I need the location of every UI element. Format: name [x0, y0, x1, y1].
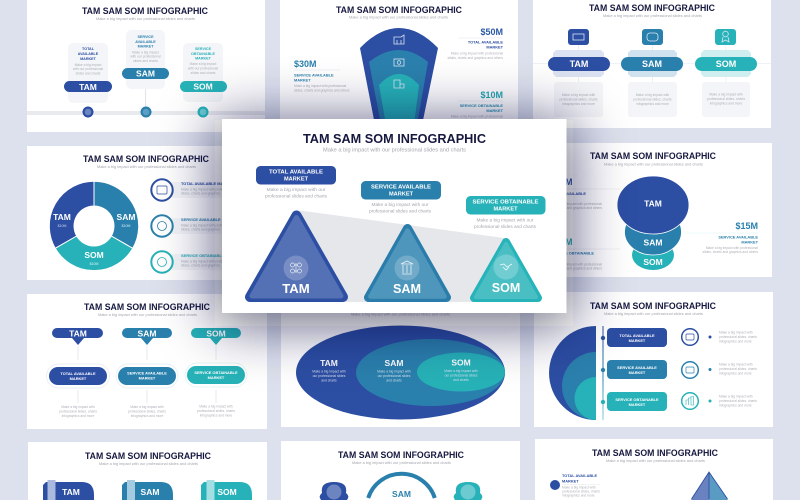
- panel: speech pills slide: TAM SAM SOM INFOGRAPHIC: [84, 302, 210, 313]
- panel: timeline slide: TAM SAM SOM INFOGRAPHIC: [82, 6, 208, 17]
- panel: fan slide: [280, 0, 518, 125]
- panel: donut slide: Make a big impact with professional: [181, 188, 233, 192]
- panel: speech pills slide: infographics and more: [131, 414, 163, 418]
- panel: donut slide: SAM: [117, 212, 135, 222]
- panel: stacked pills slide: SAM: [642, 59, 662, 69]
- panel: donut slide: $10M: [58, 224, 66, 228]
- panel: timeline slide: with our professional: [188, 66, 218, 70]
- panel: fan slide: Make a big impact with professional: [294, 84, 346, 88]
- panel: donut slide: SERVICE OBTAINABLE MARKET: [181, 253, 243, 258]
- panel: pyramid slide: TAM SAM SOM INFOGRAPHIC: [592, 448, 718, 459]
- panel: nested ellipses slide: our professional slides: [378, 374, 411, 378]
- SAM triangle: [368, 228, 446, 298]
- SOM label pill: SERVICE OBTAINABLE: [472, 200, 539, 206]
- panel: speech pills slide: MARKET: [70, 376, 87, 381]
- panel: stacked pills slide: infographics and more: [710, 102, 742, 106]
- SAM triangle: SAM: [393, 281, 421, 296]
- panel: stacked ellipses slide: SOM: [643, 257, 663, 267]
- panel: timeline slide: AVAILABLE: [135, 40, 156, 44]
- TAM label pill: [256, 166, 336, 184]
- panel: timeline slide: slides and charts: [133, 59, 158, 63]
- panel: scroll slide: SAM: [141, 487, 159, 497]
- panel: donut slide: SERVICE AVAILABLE MARKET: [181, 217, 239, 222]
- panel: stacked ellipses slide: $15M: [735, 221, 758, 231]
- panel: timeline slide: Make a big impact with our professional slides and charts: [96, 17, 195, 21]
- panel: stacked ellipses slide: SERVICE OBTAINABLE: [551, 250, 594, 256]
- panel: nested ellipses slide: SOM: [451, 358, 471, 368]
- panel: speech pills slide: TOTAL AVAILABLE: [60, 371, 96, 376]
- panel: stacked pills slide: TAM: [570, 59, 588, 69]
- grey connecting wedge: [300, 210, 504, 302]
- panel: scroll slide: SOM: [217, 487, 237, 497]
- panel: half circles slide: MARKET: [629, 402, 646, 407]
- panel: fan slide: MARKET: [486, 44, 504, 50]
- panel: half circles slide: infographics and more: [719, 404, 752, 408]
- panel: timeline slide: slides and charts: [191, 71, 216, 75]
- panel: nested ellipses slide: and charts: [453, 378, 469, 382]
- panel: speech pills slide: SERVICE AVAILABLE: [127, 370, 167, 376]
- panel: pyramid slide: TOTAL AVAILABLE: [562, 473, 598, 478]
- panel: stacked pills slide: SOM: [716, 59, 736, 69]
- panel: speech pills slide: SAM: [138, 328, 156, 338]
- panel: donut slide: $10M: [122, 224, 130, 228]
- SAM label pill: SERVICE AVAILABLE: [371, 184, 431, 190]
- panel: scroll slide: TAM: [62, 487, 80, 497]
- panel: donut slide: TAM: [53, 212, 71, 222]
- panel: main triangles slide: [222, 119, 566, 313]
- panel: timeline slide: with our professional: [73, 67, 103, 71]
- SOM label pill: [466, 196, 546, 214]
- panel: speech pills slide: Make a big impact with: [199, 404, 233, 408]
- panel: timeline slide: MARKET: [138, 44, 154, 48]
- donut chart: [49, 181, 139, 271]
- panel: timeline slide: Make a big impact: [190, 62, 216, 66]
- panel: fan slide: SERVICE OBTAINABLE: [460, 103, 503, 108]
- panel: donut slide: slides, charts and graphics: [181, 228, 220, 232]
- panel: nested ellipses slide: TAM: [320, 358, 338, 368]
- panel: fan slide: TOTAL AVAILABLE: [468, 40, 503, 44]
- icon: TAM network: [284, 256, 308, 280]
- panel: pyramid slide: infographics and more: [562, 494, 595, 498]
- panel: half circles slide: TOTAL AVAILABLE: [619, 333, 655, 338]
- panel: stacked pills slide: Make a big impact with: [709, 92, 743, 96]
- panel: fan slide: MARKET: [294, 78, 311, 82]
- panel: stacked pills slide: Make a big impact with: [636, 93, 669, 97]
- panel: donut slide: TOTAL AVAILABLE MARKET: [181, 181, 235, 186]
- panel: fan slide: SERVICE AVAILABLE: [294, 72, 334, 78]
- panel: timeline slide: SERVICE: [137, 35, 154, 39]
- panel: stacked ellipses slide: TAM SAM SOM INFOGRAPHIC: [590, 151, 716, 162]
- panel: donut slide: Make a big impact with professional: [181, 260, 233, 264]
- panel: speech pills slide: Make a big impact with: [61, 405, 95, 409]
- TAM description: Make a big impact with our: [266, 187, 326, 192]
- panel: half circles slide: TAM SAM SOM INFOGRAPHIC: [590, 301, 716, 312]
- panel: fan slide: $30M: [294, 59, 317, 69]
- panel: stacked ellipses slide: MARKET: [741, 240, 759, 244]
- panel: half circles slide: MARKET: [629, 338, 646, 343]
- panel: half circles slide: professional slides, charts: [719, 367, 757, 371]
- panel: fan slide: Make a big impact with our professional slides and charts: [349, 16, 448, 20]
- panel: half circles slide: professional slides, charts: [719, 399, 757, 403]
- panel: scroll slide: [28, 442, 267, 500]
- SAM description: Make a big impact with our: [372, 202, 429, 207]
- panel: stacked ellipses slide: SAM: [644, 238, 662, 248]
- panel: nested ellipses slide: Make a big impact with: [377, 370, 411, 374]
- panel: donut slide: SOM: [84, 250, 104, 260]
- SOM description: [474, 218, 536, 229]
- icon: SAM bank: [394, 256, 420, 280]
- panel: stacked ellipses slide: Make a big impact with professional: [706, 246, 758, 250]
- panel: stacked pills slide: TAM SAM SOM INFOGRAPHIC: [589, 3, 715, 14]
- panel: speech pills slide: MARKET: [208, 375, 225, 380]
- panel: speech pills slide: professional slides, charts: [197, 409, 235, 413]
- panel: nested ellipses slide: Make a big impact with our professional slides and charts: [351, 312, 450, 316]
- panel: speech pills slide: SOM: [206, 328, 226, 338]
- panel: half circles slide: Make a big impact with our professional slides and charts: [604, 312, 703, 316]
- panel: stacked pills slide: professional slides, charts: [707, 97, 745, 101]
- panel: speech pills slide: Make a big impact with our professional slides and charts: [98, 313, 197, 317]
- panel: stacked ellipses slide: $10M: [550, 237, 572, 247]
- panel: timeline slide: [27, 0, 265, 132]
- panel: donut slide: [27, 146, 267, 280]
- SOM label pill: MARKET: [494, 206, 518, 212]
- SOM description: professional slides and charts: [474, 224, 536, 229]
- SAM label pill: MARKET: [389, 192, 413, 198]
- panel: stacked ellipses slide: Make a big impact with professional: [550, 262, 602, 266]
- panel: pyramid slide: Make a big impact with: [562, 486, 596, 490]
- panel: timeline slide: AVAILABLE: [78, 52, 99, 56]
- panel: scroll slide: Make a big impact with our professional slides and charts: [99, 462, 198, 466]
- panel: fan slide: slides, charts and graphics and others: [294, 88, 350, 92]
- panel: half circles slide: infographics and more: [719, 340, 752, 344]
- TAM triangle: [250, 216, 343, 297]
- TAM label pill: MARKET: [284, 176, 308, 182]
- panel: stacked pills slide: infographics and more: [562, 102, 595, 106]
- panel: nested ellipses slide: [281, 280, 520, 427]
- panel: stacked ellipses slide: TAM: [644, 198, 662, 208]
- panel: fan slide: $50M: [480, 27, 503, 37]
- panel: fan slide: MARKET: [486, 108, 504, 113]
- panel: speech pills slide: SERVICE OBTAINABLE: [194, 370, 238, 375]
- panel: speech pills slide: professional slides, charts: [128, 410, 166, 414]
- panel: speech pills slide: Make a big impact with: [130, 405, 164, 409]
- panel: timeline slide: MARKET: [195, 56, 212, 60]
- panel: pyramid slide: professional slides, charts: [562, 490, 600, 494]
- panel: stacked ellipses slide: slides, charts and graphics and others: [546, 266, 602, 270]
- panel: half circles slide: MARKET: [629, 370, 646, 375]
- panel: stacked ellipses slide: SERVICE AVAILABLE: [718, 234, 758, 240]
- panel: stacked pills slide: professional slides, charts: [634, 98, 672, 102]
- panel: donut slide: slides, charts and graphics: [181, 264, 220, 268]
- panel: arc slide: [281, 441, 520, 500]
- panel: half circles slide: SERVICE OBTAINABLE: [615, 397, 659, 402]
- panel: arc slide: TAM SAM SOM INFOGRAPHIC: [338, 450, 464, 461]
- panel: half circles slide: SERVICE AVAILABLE: [617, 365, 657, 370]
- panel: nested ellipses slide: and charts: [386, 378, 402, 382]
- TAM triangle: TAM: [282, 281, 310, 296]
- panel: timeline slide: TAM: [79, 82, 97, 92]
- panel: donut slide: slides, charts and graphics: [181, 192, 220, 196]
- panel: stacked ellipses slide: [533, 143, 772, 277]
- panel: stacked pills slide: professional slides, charts: [560, 98, 598, 102]
- panel: nested ellipses slide: our professional slides: [445, 374, 478, 378]
- panel: timeline slide: SERVICE: [195, 47, 212, 51]
- icon: SOM handshake: [494, 254, 518, 280]
- panel: timeline slide: SOM: [193, 82, 213, 92]
- panel: nested ellipses slide: Make a big impact with: [312, 370, 346, 374]
- panel: pyramid slide: Make a big impact with our professional slides and charts: [606, 459, 705, 463]
- panel: stacked ellipses slide: TOTAL AVAILABLE: [551, 191, 586, 196]
- panel: timeline slide: MARKET: [80, 57, 97, 61]
- panel: nested ellipses slide: Make a big impact with: [444, 369, 478, 373]
- panel: timeline slide: SAM: [136, 68, 155, 78]
- panel: donut slide: TAM SAM SOM INFOGRAPHIC: [83, 154, 209, 165]
- panel: nested ellipses slide: SAM: [385, 358, 403, 368]
- panel: stacked pills slide: Make a big impact with our professional slides and charts: [603, 14, 702, 18]
- panel: fan slide: TAM SAM SOM INFOGRAPHIC: [336, 5, 462, 16]
- SAM description: [369, 202, 431, 214]
- panel: nested ellipses slide: and charts: [321, 378, 337, 382]
- TAM description: professional slides and charts: [265, 194, 327, 198]
- panel: scroll slide: TAM SAM SOM INFOGRAPHIC: [85, 451, 211, 462]
- panel: donut slide: $10M: [90, 262, 98, 266]
- panel: donut slide: Make a big impact with our professional slides and charts: [97, 165, 196, 169]
- panel: stacked ellipses slide: Make a big impact with our professional slides and charts: [604, 162, 703, 166]
- panel: arc slide: SAM: [392, 489, 411, 499]
- panel: stacked pills slide: [533, 0, 771, 128]
- SOM triangle: [474, 242, 538, 298]
- panel: speech pills slide: professional slides, charts: [59, 410, 97, 414]
- title: TAM SAM SOM INFOGRAPHIC: [303, 131, 487, 146]
- panel: timeline slide: Make a big impact: [132, 50, 159, 54]
- panel: speech pills slide: MARKET: [139, 376, 156, 380]
- panel: timeline slide: slides and charts: [76, 72, 101, 76]
- panel: timeline slide: TOTAL: [82, 47, 95, 51]
- panel: half circles slide: Make a big impact with: [719, 362, 753, 366]
- panel: donut slide: Make a big impact with professional: [181, 224, 233, 228]
- panel: timeline slide: OBTAINABLE: [191, 52, 215, 56]
- subtitle: Make a big impact with our professional slides and charts: [323, 148, 466, 154]
- panel: half circles slide: Make a big impact with: [719, 394, 753, 398]
- panel: pyramid slide: [535, 439, 773, 500]
- panel: stacked ellipses slide: slides, charts and graphics and others: [546, 206, 602, 210]
- panel: timeline slide: with our professional: [130, 54, 161, 58]
- center slide shadow: [215, 120, 573, 326]
- panel: half circles slide: professional slides, charts: [719, 335, 757, 339]
- panel: timeline slide: Make a big impact: [75, 63, 101, 67]
- panel: half circles slide: infographics and more: [719, 372, 752, 376]
- SOM description: Make a big impact with our: [476, 218, 534, 222]
- panel: speech pills slide: [27, 294, 267, 429]
- panel: stacked ellipses slide: slides, charts and graphics and others: [702, 250, 758, 254]
- panel: stacked ellipses slide: Make a big impact with professional: [550, 202, 602, 206]
- panel: fan slide: slides, charts and graphics and others: [447, 56, 503, 60]
- TAM label pill: TOTAL AVAILABLE: [269, 170, 323, 176]
- panel: speech pills slide: TAM: [69, 328, 87, 338]
- panel: nested ellipses slide: our professional slides: [313, 374, 346, 378]
- panel: pyramid slide: MARKET: [562, 478, 579, 484]
- panel: fan slide: Make a big impact with professional: [451, 52, 503, 56]
- panel: stacked pills slide: Make a big impact with: [562, 93, 595, 97]
- panel: half circles slide: Make a big impact with: [719, 330, 753, 334]
- panel: arc slide: Make a big impact with our professional slides and charts: [352, 461, 451, 465]
- TAM description: [265, 187, 327, 198]
- panel: speech pills slide: infographics and more: [62, 414, 94, 418]
- SAM description: professional slides and charts: [369, 208, 431, 214]
- SAM label pill: [361, 181, 441, 200]
- panel: stacked pills slide: infographics and more: [636, 102, 669, 106]
- panel: fan slide: $10M: [480, 90, 503, 100]
- panel: half circles slide: [534, 292, 773, 427]
- panel: fan slide: Make a big impact with professional: [451, 114, 503, 118]
- panel: stacked ellipses slide: $50M: [550, 177, 572, 187]
- SOM triangle: SOM: [492, 280, 520, 295]
- panel: speech pills slide: infographics and more: [200, 414, 232, 418]
